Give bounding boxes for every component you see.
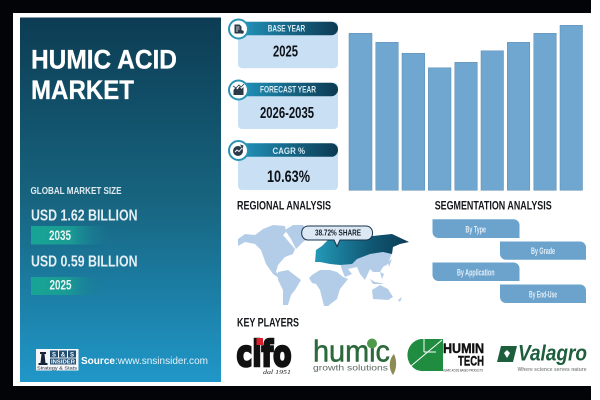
logo: valagro: Valagro	[518, 341, 587, 366]
segment: by type: By Type	[466, 224, 486, 234]
card: cagr: 10.63%	[267, 167, 310, 186]
logo: humintech	[407, 339, 484, 372]
title	[31, 44, 177, 105]
market size 2035: USD 1.62 BILLION	[31, 208, 138, 225]
global market size label: GLOBAL MARKET SIZE	[30, 186, 122, 197]
card: base year: 2025	[273, 44, 298, 60]
panel: market summary	[20, 18, 221, 382]
market size 2025: USD 0.59 BILLION	[31, 254, 138, 271]
title: HUMIC ACID	[31, 44, 177, 74]
card: forecast year: 2026-2035	[260, 105, 314, 122]
card: cagr	[229, 141, 338, 190]
segment: by grade	[500, 242, 586, 260]
callout: share: 38.72% SHARE	[315, 228, 361, 238]
market size 2025: 2025	[50, 278, 72, 292]
logo: valagro: Where science serves nature	[518, 367, 586, 373]
regional analysis heading: REGIONAL ANALYSIS	[237, 200, 331, 212]
source logo: INSIDER	[51, 360, 75, 366]
segment: by end-use: By End-Use	[529, 290, 557, 300]
source text: Source:www.snsinsider.com	[81, 355, 208, 367]
logo: valagro	[497, 341, 587, 373]
segment: by grade: By Grade	[531, 246, 555, 256]
source logo: S	[70, 352, 74, 358]
icon: growth	[229, 141, 248, 160]
market size 2025	[31, 254, 138, 295]
title: MARKET	[31, 75, 134, 105]
source logo: S	[52, 352, 56, 358]
source logo	[36, 349, 78, 370]
icon: chart	[229, 80, 248, 100]
logo: humintech: HUMIC ACIDS BASED PRODUCTS	[443, 368, 483, 372]
logo: humintech: TECH	[458, 354, 484, 368]
callout: share	[302, 226, 373, 246]
continents: rest of world	[238, 225, 402, 306]
segmentation analysis heading: SEGMENTATION ANALYSIS	[435, 200, 552, 212]
logo: cifo: dal 1951	[263, 369, 291, 376]
logo: humintech: HUMIN	[443, 341, 484, 356]
market size 2035: 2035	[49, 228, 71, 243]
segment: by application: By Application	[457, 268, 494, 278]
source logo: Strategy & Stats	[37, 366, 78, 370]
card: cagr: CAGR %	[272, 146, 305, 157]
source logo: &	[61, 352, 66, 358]
market size 2035	[31, 208, 138, 244]
logo: humic growth solutions: growth solutions	[313, 362, 388, 372]
key players heading: KEY PLAYERS	[237, 318, 299, 330]
logo: cifo: cifo	[236, 334, 292, 375]
bar chart	[349, 25, 582, 190]
icon: report	[229, 20, 248, 38]
world map	[238, 225, 409, 306]
segment: by end-use	[500, 284, 586, 303]
logo: humic growth solutions: humic	[313, 334, 390, 368]
card: base year	[229, 20, 338, 68]
segment: by application	[432, 262, 520, 281]
card: base year: BASE YEAR	[268, 24, 306, 34]
highlighted region: Europe and Russia	[315, 234, 409, 265]
card: forecast year	[229, 80, 338, 129]
segment: by type	[432, 219, 520, 238]
card: forecast year: FORECAST YEAR	[260, 85, 316, 95]
